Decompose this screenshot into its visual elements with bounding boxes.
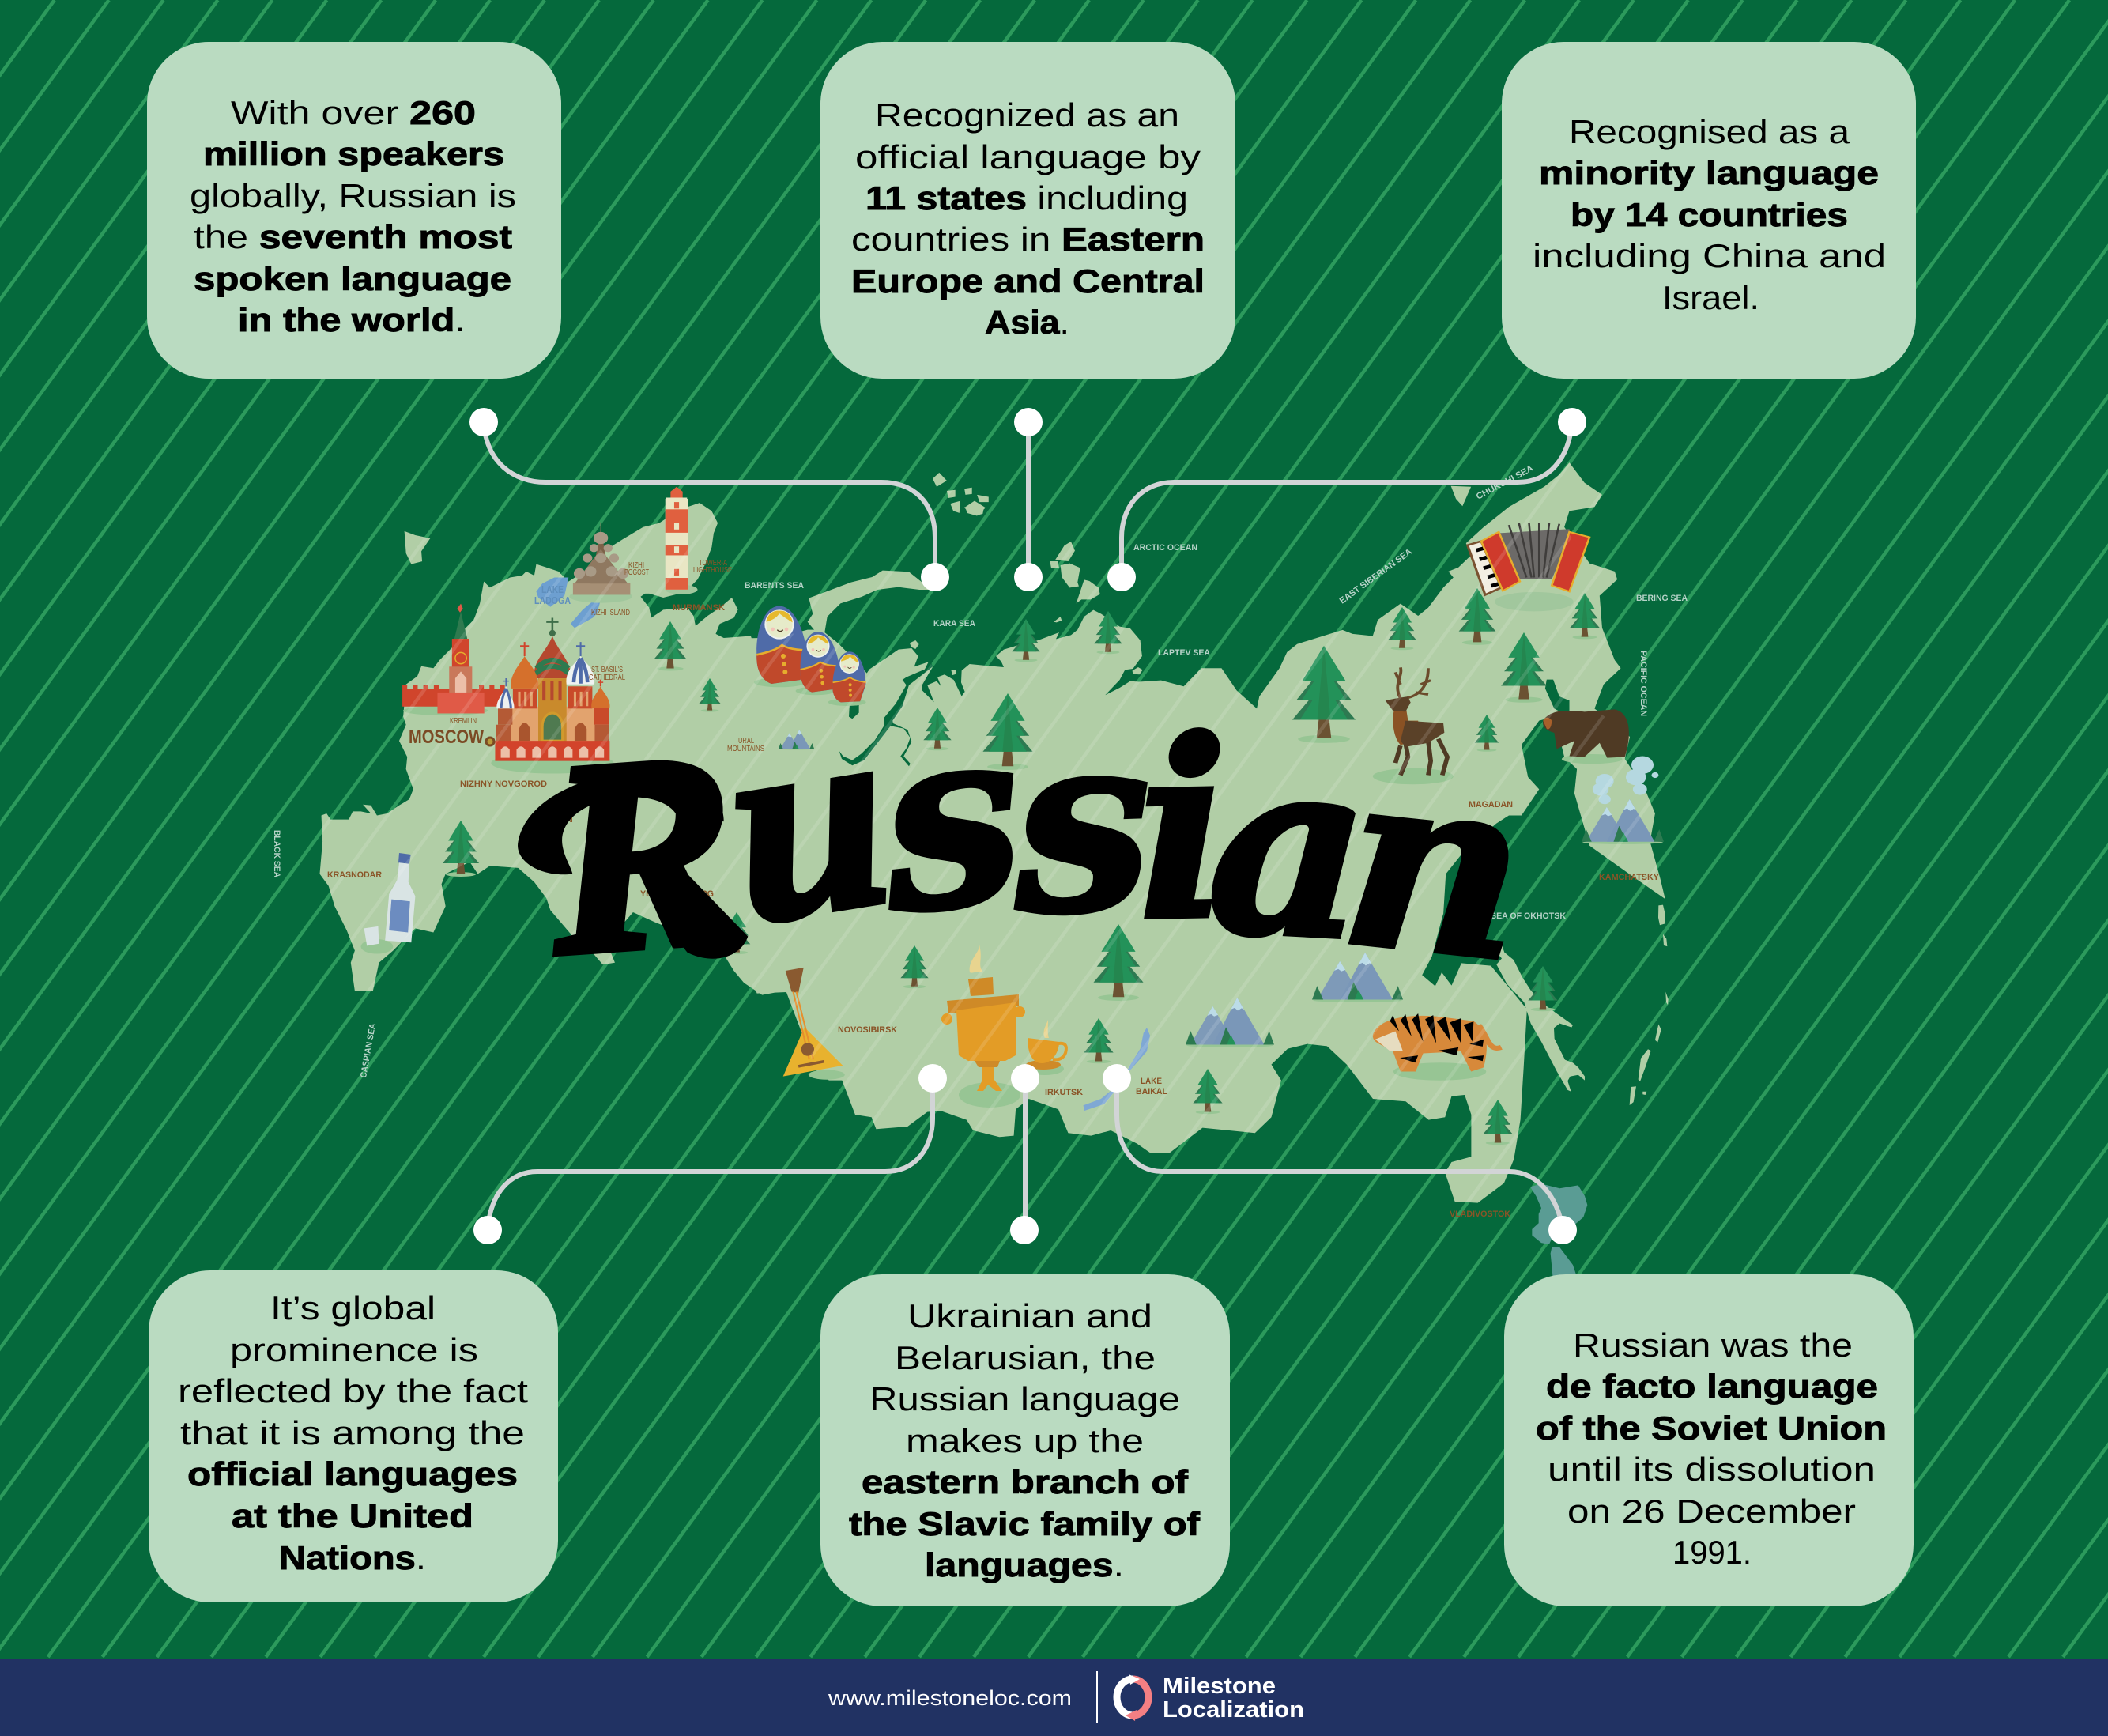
icon: matryoshka dolls <box>754 606 869 706</box>
callout: minority language by 14 countries: Recognised as a <box>1569 113 1850 150</box>
map labels: KARA SEA <box>933 619 975 628</box>
map labels: YEKATERINBURG <box>640 889 714 899</box>
callout: de facto language of the Soviet Union: de facto language <box>1546 1368 1878 1405</box>
icon: Kizhi Pogost church <box>569 523 632 603</box>
callout: eastern branch of the Slavic family: eastern branch of <box>862 1463 1189 1500</box>
callout: United Nations: that it is among the <box>180 1414 525 1451</box>
icon: balalaika <box>783 968 845 1080</box>
map labels: BAIKAL <box>1136 1087 1167 1096</box>
title: Russian: s <box>864 669 1035 970</box>
callout: official language by 11 states: 11 states including <box>865 179 1188 217</box>
callout: de facto language of the Soviet Union: of the Soviet Union <box>1536 1410 1887 1447</box>
map labels: KAMCHATSKY <box>1599 873 1660 882</box>
map labels <box>272 463 1688 1219</box>
land mass <box>319 462 1669 1203</box>
map of Russia <box>147 93 1916 1712</box>
Kizhi lake <box>571 600 601 628</box>
callout: eastern branch of the Slavic family <box>820 1274 1230 1606</box>
callout: official language by 11 states: countries in Eastern <box>851 221 1205 258</box>
callout: United Nations: prominence is <box>230 1331 478 1368</box>
map labels: KIZHI ISLAND <box>591 609 630 617</box>
callout: de facto language of the Soviet Union: 1991. <box>1672 1534 1752 1571</box>
callout: United Nations: Nations . <box>279 1539 426 1576</box>
map labels: LADOGA <box>534 594 571 606</box>
icon: Kamchatka steam <box>1593 757 1658 804</box>
footer divider <box>1096 1671 1098 1723</box>
callout: minority language by 14 countries: including China and <box>1533 237 1886 274</box>
callout: 260 million speakers: million speakers <box>203 135 504 172</box>
icon: St Basil's Cathedral <box>491 618 613 773</box>
map labels: MOUNTAINS <box>727 745 764 753</box>
callout: minority language by 14 countries: by 14 countries <box>1571 196 1848 233</box>
map labels: MOSCOW <box>409 726 484 748</box>
map labels: BLACK SEA <box>272 830 281 877</box>
callout: eastern branch of the Slavic family: Russian language <box>869 1380 1180 1417</box>
callout: United Nations <box>149 1270 558 1602</box>
footer band <box>0 1659 2108 1736</box>
map labels: KIZHI <box>628 561 644 570</box>
map labels: MAGADAN <box>1469 800 1513 810</box>
map labels: YAKUTSK <box>1289 898 1333 908</box>
icon: accordion <box>1468 523 1589 611</box>
sea islands in teal <box>1530 1184 1587 1244</box>
callout: official language by 11 states: Asia. <box>985 304 1069 341</box>
logo wordmark <box>1163 1674 1304 1723</box>
connector end dots <box>469 408 1586 1244</box>
logo wordmark: Milestone <box>1163 1674 1276 1699</box>
map labels: EAST SIBERIAN SEA <box>1338 547 1414 606</box>
map labels: NIZHNY NOVGOROD <box>460 779 547 789</box>
icon: Milestone logo ring <box>1117 1674 1148 1721</box>
title: Russian: u <box>710 659 907 980</box>
icon: vodka bottle and glass <box>361 853 415 954</box>
map labels: CASPIAN SEA <box>359 1022 378 1079</box>
callout: United Nations: It’s global <box>270 1289 436 1327</box>
icon: Siberian tiger <box>1373 1013 1501 1081</box>
map labels: CHUKCHI SEA <box>1475 463 1535 502</box>
callout: de facto language of the Soviet Union: until its dissolution <box>1548 1451 1876 1488</box>
southern teal island <box>1551 1247 1578 1281</box>
callout: eastern branch of the Slavic family: Belarusian, the <box>895 1339 1156 1376</box>
callout: de facto language of the Soviet Union <box>1504 1274 1914 1606</box>
logo wordmark: Localization <box>1163 1697 1304 1723</box>
callout: de facto language of the Soviet Union: on 26 December <box>1567 1493 1856 1530</box>
title: Russian: s <box>1005 677 1156 970</box>
map labels: MURMANSK <box>673 603 725 613</box>
title: Russian: a <box>1202 700 1376 996</box>
title: Russian <box>518 659 1538 1017</box>
map labels: LAKE <box>541 583 564 595</box>
callout: minority language by 14 countries: Israel. <box>1662 279 1759 316</box>
callout: United Nations: official languages <box>187 1455 518 1493</box>
callout: 260 million speakers: globally, Russian is <box>190 177 516 214</box>
map labels: POGOST <box>624 568 649 577</box>
callout: United Nations: reflected by the fact <box>178 1372 528 1410</box>
map labels: PACIFIC OCEAN <box>1639 651 1648 716</box>
map labels: BARENTS SEA <box>745 581 804 591</box>
callout: official language by 11 states: official language by <box>855 138 1201 175</box>
map labels: LAKE <box>1141 1077 1162 1086</box>
callout: 260 million speakers <box>147 42 561 379</box>
map labels: ST. BASIL'S <box>591 666 623 674</box>
map labels: TOWER-A <box>699 559 727 568</box>
icon: Tower-A lighthouse <box>666 487 698 594</box>
callout: eastern branch of the Slavic family: languages . <box>925 1546 1124 1583</box>
callout: de facto language of the Soviet Union: Russian was the <box>1573 1327 1853 1364</box>
map labels: CATHEDRAL <box>589 674 625 682</box>
map labels: SEA OF OKHOTSK <box>1491 911 1566 921</box>
map labels: ARCTIC OCEAN <box>1133 543 1197 553</box>
trees <box>443 588 1600 1145</box>
callout: 260 million speakers: With over 260 <box>231 94 476 131</box>
map labels: KAZAN <box>534 815 573 825</box>
callout: official language by 11 states: Europe and Central <box>851 262 1205 300</box>
map labels: URAL <box>738 737 754 745</box>
callout: eastern branch of the Slavic family: makes up the <box>906 1422 1144 1459</box>
callout: official language by 11 states <box>820 42 1235 379</box>
icon: brown bear <box>1543 709 1629 764</box>
title: Russian: i <box>1134 686 1232 976</box>
gulf of Ob and river inlets <box>839 659 933 766</box>
map labels: LIGHTHOUSE <box>693 566 732 575</box>
map labels: LAPTEV SEA <box>1158 648 1210 658</box>
lighter stripes across the land <box>322 463 1668 1202</box>
lake Ladoga <box>536 578 568 607</box>
map labels: KREMLIN <box>450 717 477 726</box>
callout: minority language by 14 countries: minority language <box>1539 154 1879 191</box>
website address: www.milestoneloc.com <box>828 1686 1072 1710</box>
map labels: IRKUTSK <box>1045 1088 1083 1097</box>
callout: 260 million speakers: spoken language <box>194 260 511 297</box>
map labels: VLADIVOSTOK <box>1450 1210 1510 1219</box>
connectors from callouts to the map <box>484 422 1572 1230</box>
map labels: NOVOSIBIRSK <box>838 1025 897 1035</box>
title: Russian: R <box>536 693 745 1013</box>
callout: 260 million speakers: the seventh most <box>194 218 512 255</box>
map labels: BERING SEA <box>1636 594 1688 603</box>
mountains <box>779 730 1664 1047</box>
inlet near the bear <box>1545 680 1570 717</box>
callout: official language by 11 states: Recognized as an <box>875 96 1179 134</box>
icon: samovar and tea cup <box>941 945 1066 1108</box>
callout: minority language by 14 countries <box>1502 42 1916 379</box>
lake Baikal <box>1083 1028 1150 1111</box>
icon: reindeer <box>1373 667 1454 784</box>
callout: eastern branch of the Slavic family: the Slavic family of <box>849 1505 1201 1542</box>
callout: 260 million speakers: in the world . <box>238 301 466 338</box>
map labels: KRASNODAR <box>327 870 382 880</box>
icon: Kremlin <box>402 604 505 715</box>
callout: eastern branch of the Slavic family: Ukrainian and <box>907 1297 1152 1334</box>
title: Russian: n <box>1331 713 1538 1017</box>
callout: United Nations: at the United <box>232 1497 473 1534</box>
